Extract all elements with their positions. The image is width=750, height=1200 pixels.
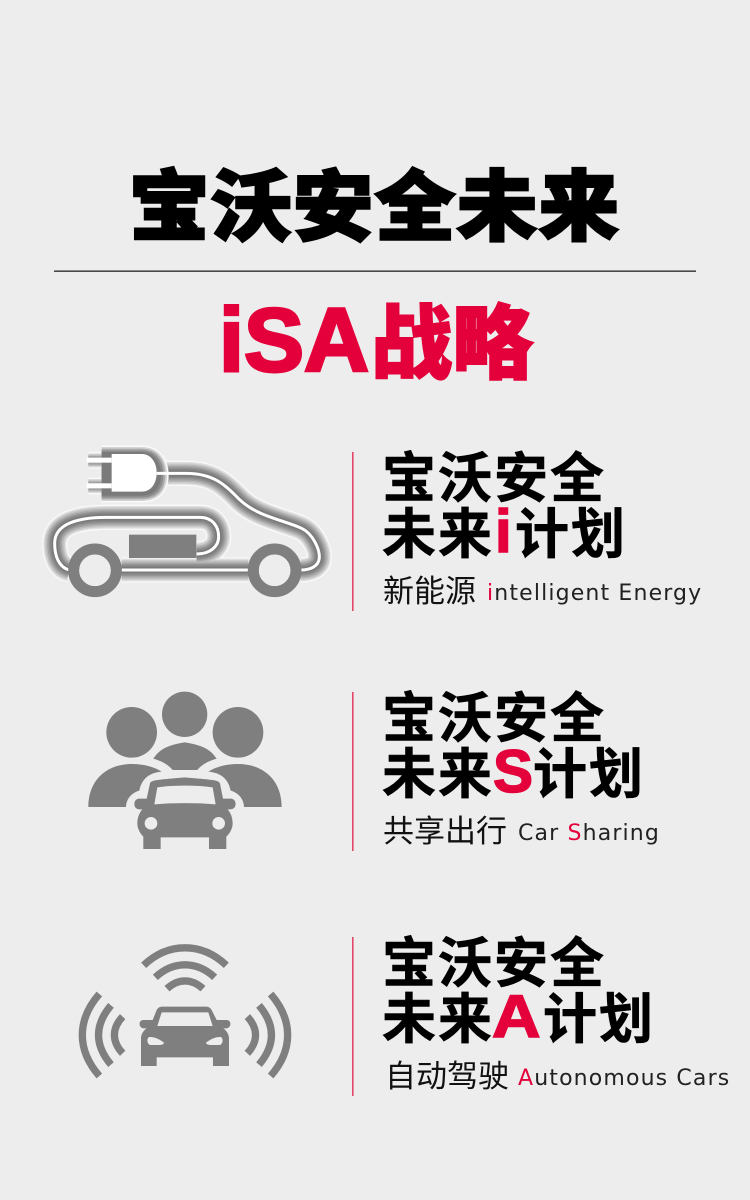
heading: i plan: 未来 [382, 490, 494, 569]
caption: new energy: intelligent Energy [487, 581, 702, 606]
heading: i plan: i [495, 498, 512, 565]
caption: car sharing [383, 806, 660, 851]
heading: A plan: 宝沃安全 [382, 919, 606, 998]
caption: car sharing: Car Sharing [518, 821, 660, 846]
caption: new energy: 新能源 [383, 566, 476, 611]
heading: S plan: 未来 [382, 730, 494, 809]
caption: car sharing: 共享出行 [383, 806, 507, 851]
caption: autonomous cars: Autonomous Cars [518, 1066, 730, 1091]
heading: i plan [382, 434, 627, 569]
title: 宝沃安全未来 [129, 145, 621, 256]
subtitle: iSA strategy: 战略 [371, 279, 533, 396]
heading: S plan [382, 674, 645, 809]
heading: i plan: 宝沃安全 [382, 434, 606, 513]
icon: autonomous car with signal waves [82, 948, 288, 1076]
divider: third row [352, 937, 354, 1096]
heading: S plan: S [493, 738, 533, 805]
divider: first row [352, 452, 354, 611]
heading: S plan: 计划 [533, 730, 645, 809]
subtitle: iSA strategy [219, 279, 533, 396]
heading: i plan: 计划 [515, 490, 627, 569]
caption: autonomous cars [385, 1051, 730, 1096]
heading: A plan: 计划 [543, 975, 655, 1054]
heading: A plan: A [492, 983, 541, 1050]
caption: autonomous cars: 自动驾驶 [385, 1051, 509, 1096]
divider: second row [352, 692, 354, 851]
heading: A plan: 未来 [382, 975, 494, 1054]
caption: new energy [383, 566, 702, 611]
heading: S plan: 宝沃安全 [382, 674, 606, 753]
heading: A plan [382, 919, 655, 1054]
subtitle: iSA strategy: iSA [219, 291, 369, 391]
icon: electric car with plug cable [55, 445, 319, 592]
icon: shared car with people [88, 692, 282, 849]
